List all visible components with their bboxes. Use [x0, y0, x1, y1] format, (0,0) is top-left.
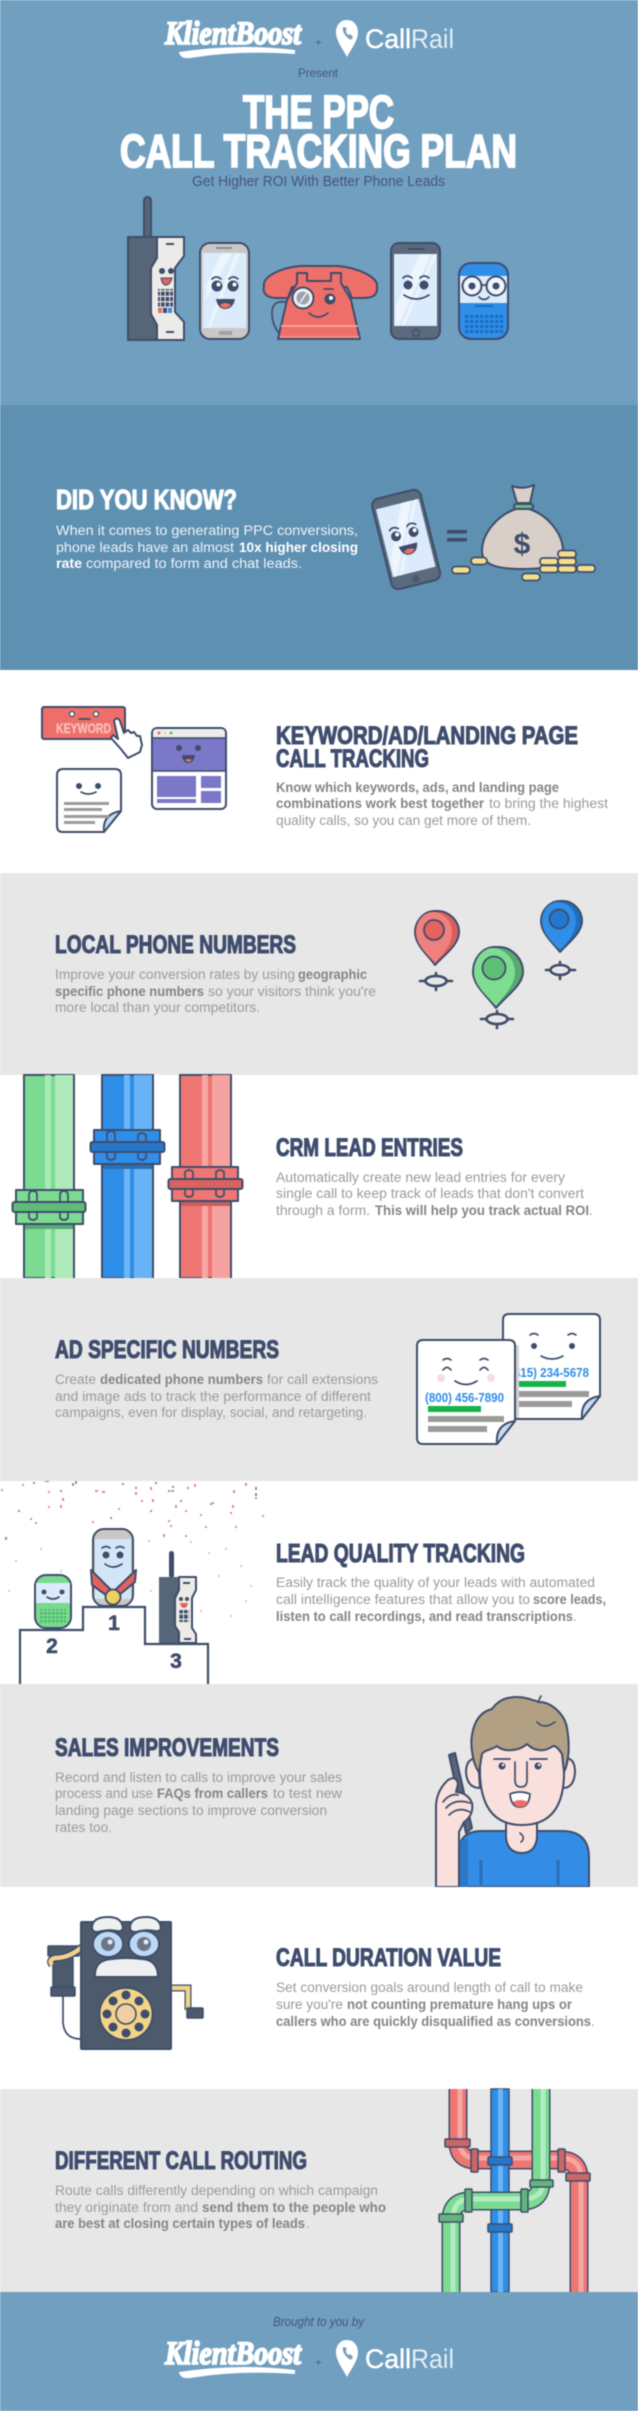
- text block: keyword tracking: combinations work best together: [276, 796, 485, 811]
- icon: front phone number note: (800) 456-7890: [425, 1390, 504, 1405]
- heading: lead quality tracking: LEAD QUALITY TRACKING: [276, 1538, 525, 1568]
- green routed pipe: [439, 2089, 553, 2292]
- panel: local phone numbers: [0, 873, 638, 1075]
- text block: call duration value: Set conversion goals around length of call to make: [276, 1980, 583, 1995]
- text block: local phone numbers: geographic: [298, 967, 367, 982]
- logo: CallRail: Call: [365, 24, 411, 54]
- icon: front phone number note: [417, 1340, 519, 1444]
- icon: keyword button: [42, 707, 125, 739]
- text block: keyword tracking: Know which keywords, ads, and landing page: [276, 780, 559, 795]
- heading: crm lead entries: CRM LEAD ENTRIES: [276, 1134, 463, 1162]
- icon: first place smartphone with medal: [91, 1529, 136, 1606]
- icon: third place brick phone: [159, 1551, 196, 1643]
- text block: lead quality tracking: [276, 1575, 606, 1624]
- illustration: red pipe: [168, 1075, 242, 1278]
- illustration: blue pipe: [90, 1075, 164, 1278]
- text block: ad specific numbers: dedicated phone numbers: [100, 1372, 263, 1387]
- icon: red rotary phone: [264, 266, 377, 339]
- text block: local phone numbers: specific phone numbers: [55, 984, 204, 999]
- text block: call duration value: [276, 1980, 595, 2029]
- icon: document face: [57, 769, 121, 832]
- panel: header: [0, 0, 638, 405]
- illustration: podium: 2: [46, 1635, 58, 1658]
- logo: KlientBoost: KlientBoost: [164, 2336, 302, 2372]
- heading: did you know: DID YOU KNOW?: [56, 484, 237, 515]
- text block: sales improvements: [55, 1770, 342, 1835]
- text block: lead quality tracking: score leads,: [533, 1592, 606, 1607]
- text block: sales improvements: to test new: [273, 1786, 342, 1801]
- panel: different call routing: [0, 2089, 638, 2292]
- text block: ad specific numbers: campaigns, even for display, social, and retargeting.: [55, 1405, 367, 1420]
- icon: money bag with coins: $: [514, 528, 531, 561]
- text block: ad specific numbers: [55, 1372, 378, 1420]
- heading: ad specific numbers: AD SPECIFIC NUMBERS: [55, 1336, 279, 1364]
- text block: call duration value: not counting premature hang ups or: [347, 1997, 573, 2012]
- heading: keyword/ad/landing page: CALL TRACKING: [276, 745, 429, 773]
- panel: lead quality tracking: [0, 1481, 638, 1684]
- icon: blue map pin: [541, 901, 582, 979]
- text block: did you know: 10x higher closing: [239, 540, 358, 555]
- icon: red map pin: [415, 911, 459, 990]
- panel: did you know: [0, 405, 638, 670]
- text block: sales improvements: landing page sections to improve conversion: [55, 1803, 327, 1818]
- icon: hand cursor: [111, 718, 142, 758]
- illustration: antique wall phone: [48, 1917, 203, 2049]
- illustration: confetti: [1, 1481, 264, 1617]
- logo: CallRail: Call: [365, 2344, 411, 2374]
- panel: keyword/ad/landing page call tracking: [0, 670, 638, 873]
- heading: keyword/ad/landing page: [276, 722, 578, 773]
- text block: ad specific numbers: and image ads to track the performance of different: [55, 1389, 371, 1404]
- text block: local phone numbers: [55, 967, 376, 1015]
- text block: did you know: When it comes to generating PPC conversions,: [56, 523, 358, 538]
- text: brought to you by: Brought to you by: [273, 2315, 365, 2329]
- logo: CallRail: Rail: [411, 2344, 454, 2374]
- text block: call duration value: callers who are quickly disqualified as conversions: [276, 2014, 591, 2029]
- illustration: green pipe: [12, 1075, 86, 1278]
- text block: did you know: compared to form and chat leads.: [86, 556, 302, 571]
- illustration: podium: 1: [108, 1612, 120, 1635]
- icon: brick phone: [128, 197, 184, 340]
- logo: CallRail: [336, 2340, 454, 2377]
- text block: sales improvements: Record and listen to calls to improve your sales: [55, 1770, 342, 1785]
- text block: did you know: [56, 523, 358, 571]
- icon: smiling smartphone: [200, 243, 249, 339]
- icon: keyword button: KEYWORD: [56, 720, 111, 736]
- text block: sales improvements: FAQs from callers: [157, 1786, 268, 1801]
- logo: CallRail: Rail: [411, 24, 454, 54]
- text block: keyword tracking: [276, 780, 608, 828]
- icon: back phone number note: (415) 234-5678: [510, 1365, 589, 1380]
- text block: crm lead entries: .: [589, 1203, 593, 1218]
- blue routed pipe: [488, 2089, 512, 2292]
- red routed pipe: [445, 2089, 590, 2292]
- text block: different call routing: [55, 2183, 386, 2231]
- text block: crm lead entries: This will help you track actual ROI: [375, 1203, 589, 1218]
- heading: local phone numbers: LOCAL PHONE NUMBERS: [55, 931, 296, 959]
- heading: keyword/ad/landing page: KEYWORD/AD/LANDING PAGE: [276, 722, 578, 750]
- title: THE PPC: [243, 86, 394, 138]
- text block: sales improvements: process and use: [55, 1786, 153, 1801]
- text block: keyword tracking: quality calls, so you can get more of them.: [276, 813, 531, 828]
- heading: different call routing: DIFFERENT CALL ROUTING: [55, 2147, 307, 2175]
- heading: call duration value: CALL DURATION VALUE: [276, 1944, 501, 1972]
- text block: crm lead entries: Automatically create new lead entries for every: [276, 1170, 565, 1185]
- icon: second place green phone: [35, 1575, 71, 1628]
- text block: different call routing: they originate from and: [55, 2200, 198, 2215]
- illustration: man on the phone: [436, 1696, 589, 1887]
- illustration: podium: [20, 1607, 208, 1684]
- text block: local phone numbers: so your visitors think you're: [208, 984, 376, 999]
- illustration: routed pipes: [439, 2089, 590, 2292]
- title: [120, 86, 517, 177]
- text block: lead quality tracking: listen to call recordings, and read transcriptions: [276, 1609, 573, 1624]
- text block: crm lead entries: [276, 1170, 593, 1218]
- icon: tilted smartphone: [371, 488, 442, 591]
- text block: did you know: phone leads have an almost: [56, 540, 234, 555]
- text: Present: Present: [298, 68, 339, 80]
- icon: back phone number note: [503, 1314, 600, 1419]
- panel: ad specific numbers: [0, 1278, 638, 1481]
- subtitle: Get Higher ROI With Better Phone Leads: [192, 174, 445, 190]
- logo: KlientBoost: KlientBoost: [164, 16, 302, 52]
- text block: different call routing: .: [306, 2216, 310, 2231]
- text block: different call routing: Route calls differently depending on which campaign: [55, 2183, 378, 2198]
- icon: browser window face: [152, 728, 226, 809]
- text block: lead quality tracking: Easily track the quality of your leads with automated: [276, 1575, 595, 1590]
- text block: did you know: rate: [56, 556, 83, 571]
- icon: iPhone: [391, 243, 440, 339]
- text block: lead quality tracking: call intelligence features that allow you to: [276, 1592, 530, 1607]
- title: CALL TRACKING PLAN: [120, 125, 517, 177]
- icon: equals sign: [447, 530, 467, 542]
- icon: money bag with coins: [452, 485, 595, 580]
- panel: sales improvements: [0, 1684, 638, 1887]
- illustration: podium: 3: [170, 1650, 182, 1673]
- logo: CallRail: [336, 20, 454, 57]
- text block: local phone numbers: more local than your competitors.: [55, 1000, 260, 1015]
- text block: different call routing: send them to the people who: [202, 2200, 386, 2215]
- text block: different call routing: are best at closing certain types of leads: [55, 2216, 305, 2231]
- text block: ad specific numbers: for call extensions: [267, 1372, 378, 1387]
- icon: green map pin: [473, 947, 523, 1028]
- text block: lead quality tracking: .: [573, 1609, 577, 1624]
- icon: blackberry phone with glasses: [459, 263, 508, 339]
- text block: call duration value: .: [591, 2014, 595, 2029]
- text block: call duration value: sure you're: [276, 1997, 343, 2012]
- text block: keyword tracking: to bring the highest: [489, 796, 608, 811]
- text block: crm lead entries: through a form.: [276, 1203, 370, 1218]
- plus sign: +: [315, 2357, 322, 2369]
- text block: crm lead entries: single call to keep track of leads that don't convert: [276, 1186, 584, 1201]
- heading: sales improvements: SALES IMPROVEMENTS: [55, 1734, 279, 1762]
- panel: crm lead entries: [0, 1075, 638, 1278]
- plus sign: +: [315, 37, 322, 49]
- text block: ad specific numbers: Create: [55, 1372, 96, 1387]
- text block: sales improvements: rates too.: [55, 1820, 112, 1835]
- panel: footer: [0, 2292, 638, 2411]
- panel: call duration value: [0, 1887, 638, 2089]
- text block: local phone numbers: Improve your conversion rates by using: [55, 967, 295, 982]
